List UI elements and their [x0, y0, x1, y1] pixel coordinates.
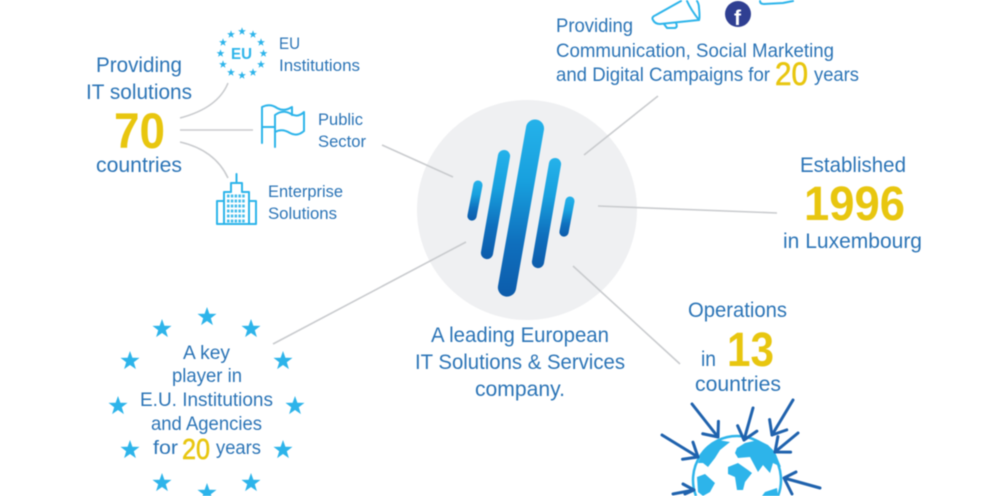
central logo circle: [417, 100, 637, 320]
text block: providing IT solutions in 70 countries: IT solutions: [86, 81, 192, 104]
text block: key player in EU institutions: for: [153, 437, 179, 459]
continents: [697, 440, 781, 496]
label: EU Institutions: [279, 34, 360, 75]
icon: globe: [693, 436, 781, 496]
logo bars: [467, 119, 575, 297]
text block: providing IT solutions in 70 countries: countries: [96, 154, 182, 177]
text block: communication and social marketing: and Digital Campaigns for: [556, 64, 770, 86]
label: Enterprise Solutions: Solutions: [268, 204, 337, 223]
icon: megaphone: [652, 1, 700, 28]
text block: established 1996: Established: [800, 154, 906, 177]
label: EU Institutions: Institutions: [279, 56, 360, 75]
text block: key player in EU institutions: years: [216, 437, 261, 459]
text block: communication and social marketing: years: [814, 64, 859, 86]
icon: flags: [262, 105, 304, 147]
text block: operations in 13 countries: Operations: [688, 299, 787, 322]
label: Enterprise Solutions: Enterprise: [268, 182, 343, 201]
label: Public Sector: [318, 110, 366, 151]
text block: established 1996: 1996: [804, 178, 905, 231]
text block: key player in EU institutions: and Agencies: [151, 413, 262, 435]
icon: facebook: f: [734, 7, 742, 30]
icon: facebook: [725, 1, 751, 30]
icon: EU stars: [217, 27, 267, 79]
text block: established 1996: [783, 154, 922, 253]
label: Enterprise Solutions: [268, 182, 343, 223]
text block: providing IT solutions in 70 countries: [86, 54, 192, 177]
arrows pointing to globe: [662, 400, 820, 494]
text block: operations in 13 countries: [688, 299, 787, 396]
connector lines: [180, 83, 777, 364]
icon: EU stars: EU: [231, 46, 252, 63]
text block: company statement: [415, 324, 625, 401]
text block: company statement: A leading European: [431, 324, 609, 347]
text block: providing IT solutions in 70 countries: Providing: [96, 54, 182, 77]
icon: office building: [217, 174, 256, 224]
text block: key player in EU institutions: 20: [182, 434, 210, 466]
label: Public Sector: Public: [318, 110, 363, 129]
label: Public Sector: Sector: [318, 132, 366, 151]
icon: partial device: [760, 1, 793, 4]
text block: operations in 13 countries: in: [701, 348, 716, 371]
star ring: [108, 307, 304, 496]
text block: communication and social marketing: [556, 15, 859, 92]
text block: established 1996: in Luxembourg: [783, 230, 922, 253]
text block: communication and social marketing: Communication, Social Marketing: [556, 40, 834, 62]
text block: communication and social marketing: Providing: [556, 15, 633, 37]
text block: operations in 13 countries: 13: [727, 324, 774, 377]
text block: operations in 13 countries: countries: [695, 373, 781, 396]
text block: providing IT solutions in 70 countries: 70: [114, 103, 165, 159]
text block: key player in EU institutions: player in: [172, 365, 242, 387]
label: EU Institutions: EU: [279, 34, 300, 53]
text block: key player in EU institutions: [140, 342, 273, 466]
text block: key player in EU institutions: E.U. Institutions: [140, 389, 273, 411]
text block: company statement: company.: [475, 378, 565, 401]
text block: company statement: IT Solutions & Services: [415, 351, 625, 374]
text block: key player in EU institutions: A key: [183, 342, 230, 364]
text block: communication and social marketing: 20: [775, 56, 808, 92]
